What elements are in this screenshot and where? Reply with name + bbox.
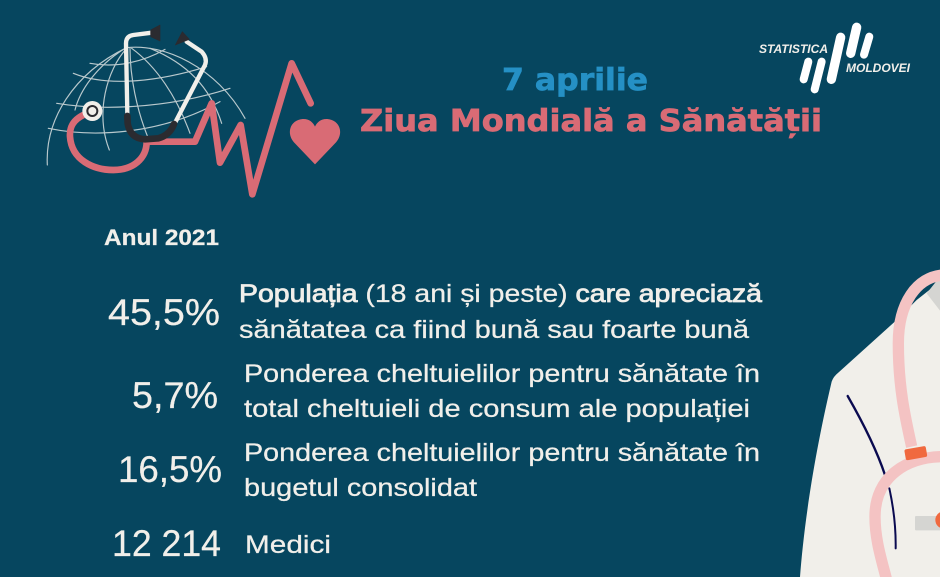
title: Ziua Mondială a Sănătății [360,104,822,139]
icon: heart [290,119,340,164]
stat: 12 214 doctors: Medici [245,531,331,559]
stat: 5,7% consumer spending: total cheltuieli de consum ale populației [244,395,750,423]
stat: 16,5% consolidated budget: 16,5% [118,449,222,490]
stat: 5,7% consumer spending: Ponderea cheltuielilor pentru sănătate în [244,360,760,388]
stat: 16,5% consolidated budget: bugetul consolidat [244,474,477,502]
orange clip [904,446,927,460]
stethoscope tube [898,275,940,447]
stat: 45,5% population [108,280,762,344]
stat: 45,5% population: Populația (18 ani și peste) care apreciază [239,280,762,308]
illustration: doctor in white coat with stethoscope [800,275,940,577]
icon: wireframe globe [47,47,245,165]
chest piece [915,516,940,530]
title [360,63,822,139]
heading: year: Anul 2021 [104,225,219,250]
icon: stethoscope [82,25,206,139]
icon: heartbeat line [70,63,311,194]
logo: Statistica Moldovei: MOLDOVEI [846,63,911,75]
stat: 45,5% population: 45,5% [108,292,220,333]
stat: 12 214 doctors: 12 214 [112,523,221,564]
coat seam [848,396,885,475]
logo: Statistica Moldovei [759,27,911,89]
stat: 45,5% population: sănătatea ca fiind bună sau foarte bună [239,316,749,344]
collar [927,277,940,311]
stat: 16,5% consolidated budget: Ponderea cheltuielilor pentru sănătate în [244,439,760,467]
stat: 5,7% consumer spending: 5,7% [132,375,218,416]
stat: 16,5% consolidated budget [118,439,760,502]
stat: 5,7% consumer spending [132,360,760,423]
stat: 12 214 doctors [112,523,331,564]
logo: Statistica Moldovei: STATISTICA [759,44,828,56]
doctor coat [800,282,940,577]
title: 7 aprilie [502,63,648,98]
icon: globe with stethoscope, heartbeat line and heart [47,25,340,194]
